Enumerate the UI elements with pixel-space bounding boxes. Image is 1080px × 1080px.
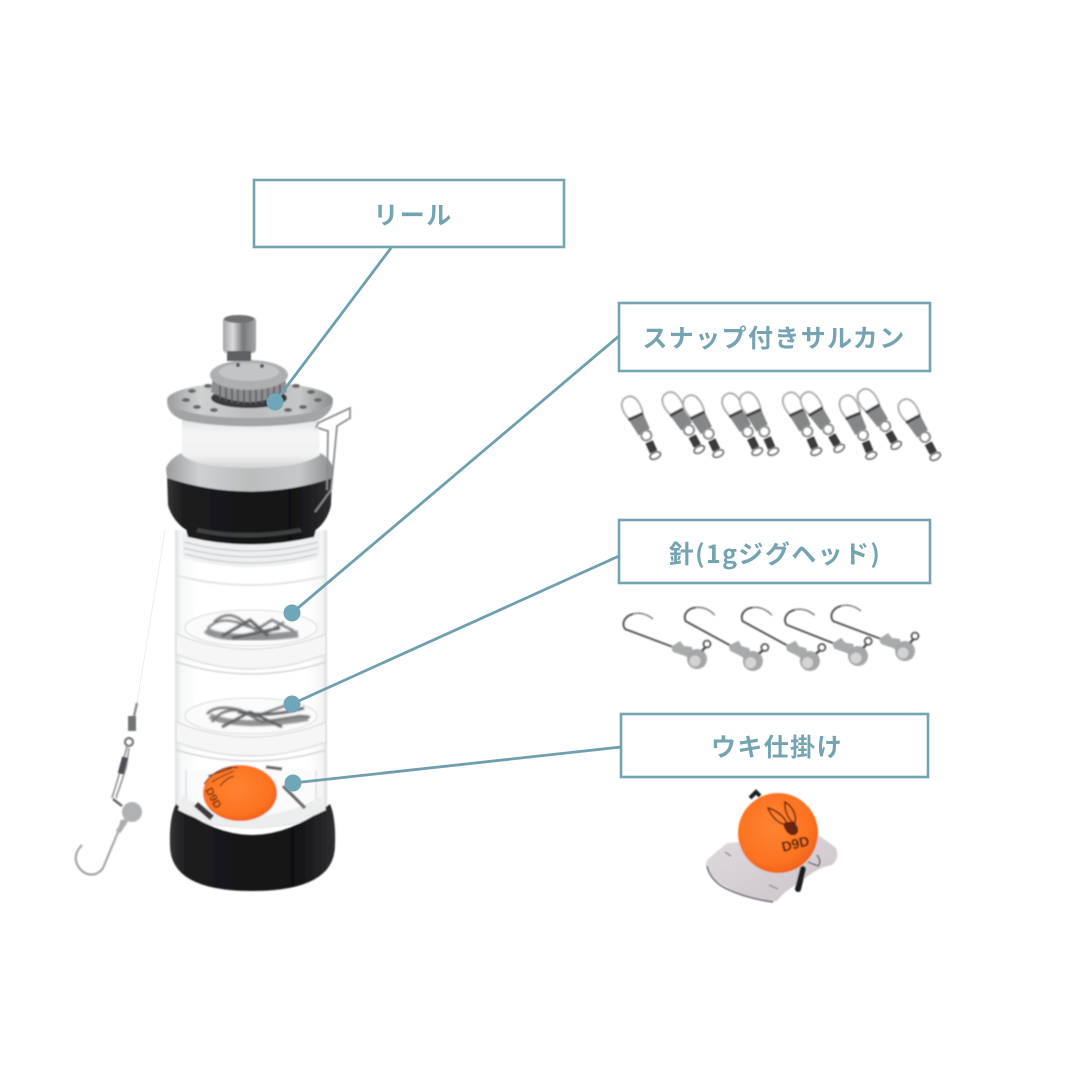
- threaded neck: [182, 532, 320, 567]
- faint fishing line: [137, 530, 165, 703]
- dark bits beside float: [266, 767, 305, 808]
- snap pile upper compartment: [206, 615, 298, 638]
- rabbit logo: [768, 802, 797, 834]
- dome knob: [210, 360, 288, 408]
- logo text: D9D: [780, 833, 811, 855]
- base cap: [170, 804, 335, 891]
- leader line: reel: [266, 248, 391, 410]
- clear tube body: [175, 530, 327, 828]
- lower metal ring: [166, 453, 333, 492]
- wire clip: [315, 408, 350, 512]
- leader line: hooks: [284, 556, 619, 712]
- black collar: [167, 474, 332, 544]
- label: float rig: ウキ仕掛け: [711, 728, 843, 764]
- top flange: [167, 382, 333, 426]
- label: reel: [254, 180, 564, 247]
- leader line: snap swivels: [284, 336, 619, 622]
- label: float rig: [621, 714, 928, 777]
- jig head row: [623, 605, 918, 673]
- label: hooks: 針(1gジグヘッド): [669, 535, 881, 571]
- clear bottom rim: [178, 796, 326, 829]
- label: hooks: [619, 520, 930, 583]
- plate: [706, 836, 837, 902]
- ball: [738, 793, 818, 873]
- float in lower compartment: D9D: [202, 786, 223, 811]
- label: snap swivels: スナップ付きサルカン: [642, 319, 906, 355]
- label: reel: リール: [373, 196, 453, 232]
- float with line holder: [706, 792, 837, 902]
- snap swivel row: [619, 386, 943, 464]
- collar lower glare: [196, 528, 302, 538]
- top post: [223, 315, 256, 361]
- leader line: float rig: [284, 747, 621, 792]
- label: snap swivels: [619, 303, 930, 371]
- float in lower compartment: [202, 765, 277, 821]
- product: bottle with reel: [166, 315, 350, 891]
- rig: swivel and jig hook: [76, 703, 142, 875]
- fishing line spool: [182, 418, 320, 468]
- snap pile middle compartment: [207, 704, 310, 727]
